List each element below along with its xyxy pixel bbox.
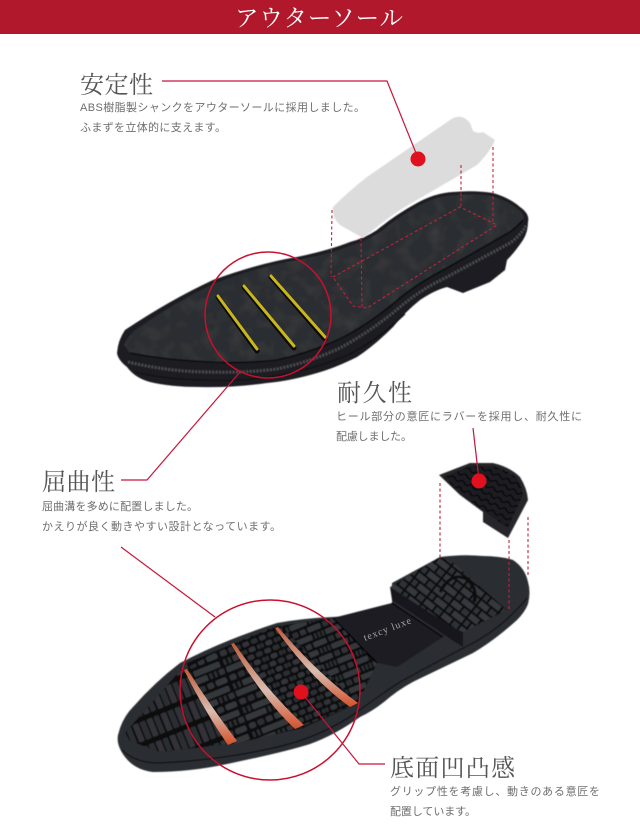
text: flexibility: 屈曲性 [42, 469, 115, 496]
shank plate [333, 117, 495, 238]
stability dot [410, 152, 426, 166]
text: flexibility [42, 469, 281, 533]
stability leader line [162, 81, 418, 158]
text: grip: 底面凹凸感 [390, 755, 516, 782]
heel piece [439, 463, 528, 538]
grip leader line [301, 692, 385, 764]
header banner [0, 0, 640, 34]
text: stability: 安定性 [80, 72, 153, 99]
durability dot [472, 474, 486, 488]
text: grip: グリップ性を考慮し、動きのある意匠を [390, 784, 600, 798]
text: stability: ABS樹脂製シャンクをアウターソールに採用しました。 [80, 100, 365, 114]
grip dot [294, 684, 308, 700]
text: durability: 配慮しました。 [336, 429, 412, 443]
text: durability: 耐久性 [337, 380, 412, 407]
top shoe walking surface [124, 194, 524, 363]
yellow flex grooves [218, 276, 325, 351]
top shoe outsole [110, 185, 535, 387]
text: flexibility: 屈曲溝を多めに配置しました。 [42, 499, 198, 513]
bottom shoe outsole [110, 555, 530, 775]
flex circle bottom [180, 600, 360, 780]
brand mark: texcy luxe [362, 615, 413, 644]
durability leader line [473, 428, 479, 480]
text: stability [80, 72, 365, 134]
text: grip [390, 755, 600, 818]
text: stability: ふまずを立体的に支えます。 [80, 120, 226, 134]
text: flexibility: かえりが良く動きやすい設計となっています。 [42, 519, 281, 533]
banner title: アウターソール [235, 6, 403, 32]
waist plate [333, 603, 443, 667]
flexibility leader line upper [121, 372, 240, 480]
heel dashed guides [440, 483, 528, 610]
orange flex grooves [184, 627, 358, 745]
flexibility leader line lower [121, 547, 215, 617]
shank dashed guides [331, 147, 497, 308]
text: durability: ヒール部分の意匠にラバーを採用し、耐久性に [336, 409, 582, 423]
forefoot tread [126, 618, 376, 752]
text: durability [336, 380, 582, 443]
text: grip: 配置しています。 [390, 805, 476, 818]
heel tread [390, 557, 507, 632]
flex circle top [205, 252, 331, 378]
